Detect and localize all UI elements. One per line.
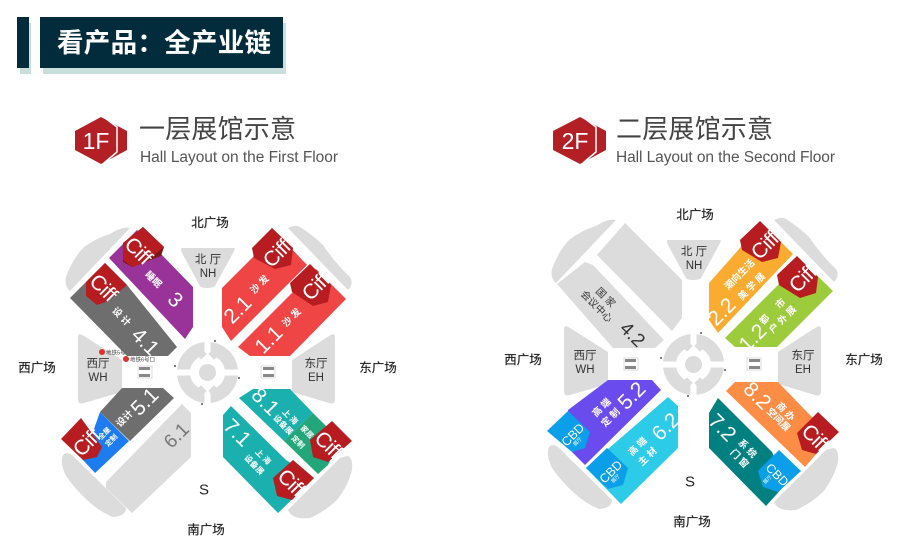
hall 8.2: 商 办 (773, 400, 798, 424)
hall 6.2: 展厅 (610, 473, 622, 485)
hall 7.1: 上 海 (253, 447, 273, 467)
hall 6.2 (586, 397, 684, 504)
hall 4.2 national convention centre: 4.2 (615, 318, 649, 352)
hall 1.1: 沙 发 (280, 305, 304, 330)
floor one heading: 1F (83, 128, 109, 154)
hall labels: 东厅 (304, 357, 328, 370)
hall 5.2: 定 制 (599, 406, 623, 430)
floor plan: second floor (504, 208, 883, 529)
hall labels: 北 厅 (195, 253, 221, 266)
floor plan: first floor (18, 216, 397, 537)
metro exits: 地铁5号口 (106, 348, 131, 356)
hall 7.1: 设备展 (242, 453, 266, 477)
hall 1.1 (238, 264, 346, 358)
hall 7.2: CBD (763, 461, 791, 489)
hall 2.2: Ciff (747, 227, 784, 264)
hall labels (86, 253, 328, 384)
plaza labels: S (199, 482, 209, 498)
venue base: plazas, halls, central ring (62, 226, 352, 518)
hall labels: EH (795, 364, 811, 376)
hall 7.2: 系 统 (735, 437, 760, 461)
hall 2.2: 美 学 展 (735, 270, 768, 303)
hall 1.2: Ciff (785, 260, 822, 297)
floor two heading (553, 114, 835, 166)
hall labels: WH (88, 372, 108, 384)
hall 5.1: 5.1 (127, 384, 163, 420)
hall 2.1: 沙 发 (248, 272, 272, 297)
hall labels: NH (686, 260, 702, 272)
plaza labels: 南广场 (673, 514, 711, 529)
hall 8.2 (726, 378, 839, 467)
hall 6.2: 高 端 (626, 434, 650, 459)
hall 2.2: 2.2 (704, 294, 740, 330)
hall 8.1: Ciff (310, 427, 347, 464)
hall 8.1: 家居 (299, 423, 317, 441)
title banner (17, 17, 286, 74)
metro exits: 地铁6号口 (130, 356, 155, 364)
hall 5.2 (547, 378, 661, 465)
hall 2.1 (220, 228, 307, 341)
hall 5.2: 展厅 (572, 436, 584, 448)
hall 4.1 (70, 263, 177, 360)
hall labels (574, 245, 814, 376)
hall 3: 睡眠 (142, 269, 165, 291)
hall 7.2 (704, 398, 801, 506)
plaza labels: 西广场 (18, 361, 56, 375)
floor one heading: Hall Layout on the First Floor (140, 149, 338, 166)
hall 1.1: Ciff (298, 268, 335, 305)
venue base: plazas, halls, central ring (548, 218, 838, 510)
plaza labels: 南广场 (187, 522, 225, 537)
hall 6.2: 6.2 (648, 409, 684, 445)
floor two heading: Hall Layout on the Second Floor (616, 149, 835, 166)
hall 5.2: 5.2 (614, 378, 650, 414)
plaza labels: 东广场 (359, 361, 397, 375)
plaza labels (504, 208, 883, 529)
hall 5.1: 全屋 (96, 425, 112, 441)
hall 1.2 (725, 256, 833, 356)
hall 3 (109, 227, 193, 339)
plaza labels: 西广场 (504, 353, 542, 367)
hall 7.1 (219, 406, 314, 513)
hall labels: 西厅 (574, 350, 596, 362)
hall 6.1: 6.1 (160, 419, 194, 453)
hall 1.2: 都 市 (757, 296, 789, 327)
hall labels: EH (308, 372, 324, 384)
hall labels: 西厅 (86, 358, 110, 370)
hall 7.2: 展厅 (762, 474, 774, 486)
upper grey hall (597, 223, 682, 331)
plaza labels: 东广场 (845, 353, 883, 367)
hall 5.1: 设计 (114, 407, 136, 430)
hall 2.1: Ciff (259, 235, 296, 272)
hall 5.2: CBD (559, 421, 587, 449)
hall labels: 北 厅 (681, 245, 707, 258)
plaza labels: S (685, 474, 695, 490)
hall 4.1: 4.1 (127, 324, 163, 360)
hall 4.1: 设 计 (109, 305, 134, 329)
hall 5.1 (61, 384, 174, 473)
hall labels: NH (200, 268, 216, 280)
hall 1.2: 1.2 (735, 320, 771, 356)
hall 4.1: Ciff (85, 270, 122, 307)
hall 2.2: 潮向生活 (722, 257, 758, 292)
hall 1.2: 户 外 展 (766, 303, 799, 336)
hall 1.1: 1.1 (251, 322, 287, 358)
hall 7.1: 7.1 (219, 415, 255, 451)
floor two heading: 2F (562, 128, 588, 154)
floor one heading (75, 114, 338, 166)
hall 6.1 (106, 404, 194, 513)
hall 2.2 (704, 221, 793, 333)
hall 8.1: 定制 (290, 433, 308, 451)
hall labels: 东厅 (792, 349, 814, 362)
hall 8.2: 8.2 (739, 378, 775, 414)
hall 8.1: 上 海 (280, 407, 300, 427)
hall 8.1: 设备展 (271, 413, 295, 437)
hall 6.2: CBD (597, 458, 625, 486)
hall 4.2 national convention centre: 会议中心 (578, 288, 615, 325)
hall 4.2 national convention centre: 国 家 (593, 285, 618, 310)
hall 2.1: 2.1 (220, 292, 256, 328)
plaza labels: 北广场 (676, 208, 714, 222)
hall 8.1 (239, 384, 352, 474)
title banner: 看产品：全产业链 (57, 28, 271, 58)
hall 8.1: 8.1 (247, 384, 283, 420)
plaza labels (18, 216, 397, 537)
hall 3: 3 (163, 288, 187, 312)
hall 5.1: 定制 (103, 432, 119, 448)
plaza labels: 北广场 (191, 216, 229, 230)
hall labels: WH (575, 364, 595, 376)
floor two heading: 二层展馆示意 (616, 114, 773, 144)
hall 6.2: 主 材 (636, 444, 660, 469)
hall 8.2: 空间展 (764, 405, 793, 434)
hall 3: Ciff (120, 233, 157, 270)
hall 5.2: 高 端 (590, 395, 614, 420)
hall 5.1: Ciff (69, 424, 106, 461)
hall 7.2: 7.2 (704, 410, 740, 446)
floor one heading: 一层展馆示意 (139, 114, 296, 144)
hall 7.1: Ciff (273, 465, 310, 502)
hall 7.2: 门 窗 (727, 447, 752, 471)
hall 4.2 national convention centre (557, 262, 664, 352)
hall 8.2: Ciff (797, 420, 834, 457)
metro exits (99, 348, 155, 364)
